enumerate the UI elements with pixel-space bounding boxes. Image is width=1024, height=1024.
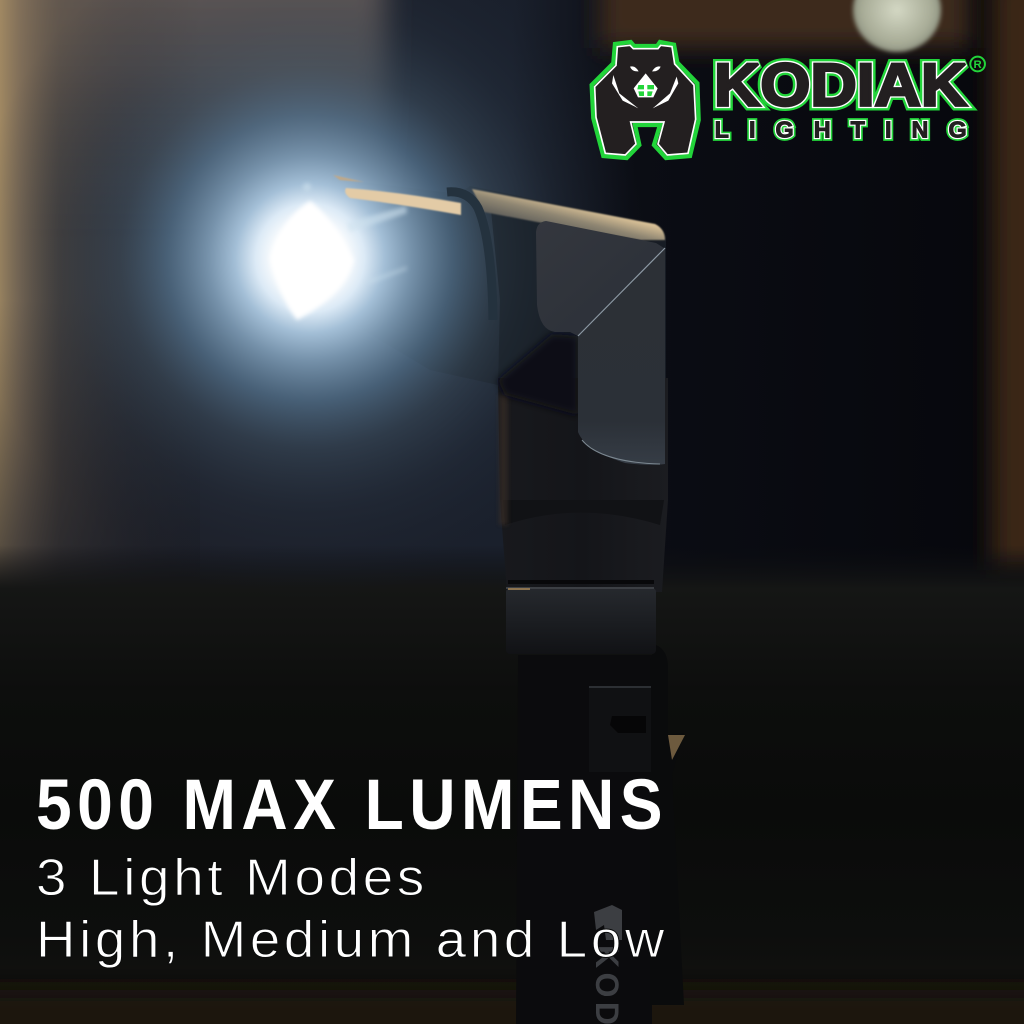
- flashlight lower body: [516, 655, 652, 1024]
- light glow: [0, 0, 650, 598]
- subhead: mode list: High, Medium and Low: [36, 911, 668, 969]
- collar ring: [447, 192, 493, 320]
- bokeh light: [853, 0, 941, 52]
- headline: 500 MAX LUMENS: [36, 766, 668, 845]
- Kodiak Lighting logo: [592, 42, 985, 158]
- barrel section: [498, 378, 668, 592]
- subhead: light modes: 3 Light Modes: [36, 849, 428, 907]
- grip ring: [506, 580, 656, 654]
- logo wordmark LIGHTING: LIGHTING: [715, 116, 967, 142]
- lens flare streaks: [303, 183, 407, 284]
- barrel warm edge: [499, 395, 508, 525]
- lens hot spot: [270, 201, 354, 320]
- top edge highlight: [345, 188, 461, 215]
- clip window: [589, 686, 651, 772]
- logo bear: [592, 42, 699, 158]
- shaded head right of collar: [490, 200, 666, 390]
- brand mark on barrel: [589, 905, 625, 1024]
- side panel: [578, 248, 665, 465]
- logo wordmark KODIAK: KODIAK: [714, 50, 968, 118]
- logo wordmark KODIAK: KODIAK: [714, 50, 968, 118]
- registered mark: R: [974, 59, 982, 71]
- logo wordmark LIGHTING: LIGHTING: [715, 116, 967, 142]
- registered mark: [970, 57, 985, 71]
- logo wordmark KODIAK: KODIAK: [714, 50, 968, 118]
- pocket clip: [650, 645, 684, 1005]
- angled head: [330, 178, 666, 385]
- brand mark on barrel: KOD: [589, 945, 625, 1024]
- head details: [333, 175, 668, 654]
- neck shadow: [498, 334, 578, 415]
- bevel panel: [536, 221, 664, 336]
- flashlight: [330, 178, 685, 1024]
- logo wordmark LIGHTING: LIGHTING: [715, 116, 967, 142]
